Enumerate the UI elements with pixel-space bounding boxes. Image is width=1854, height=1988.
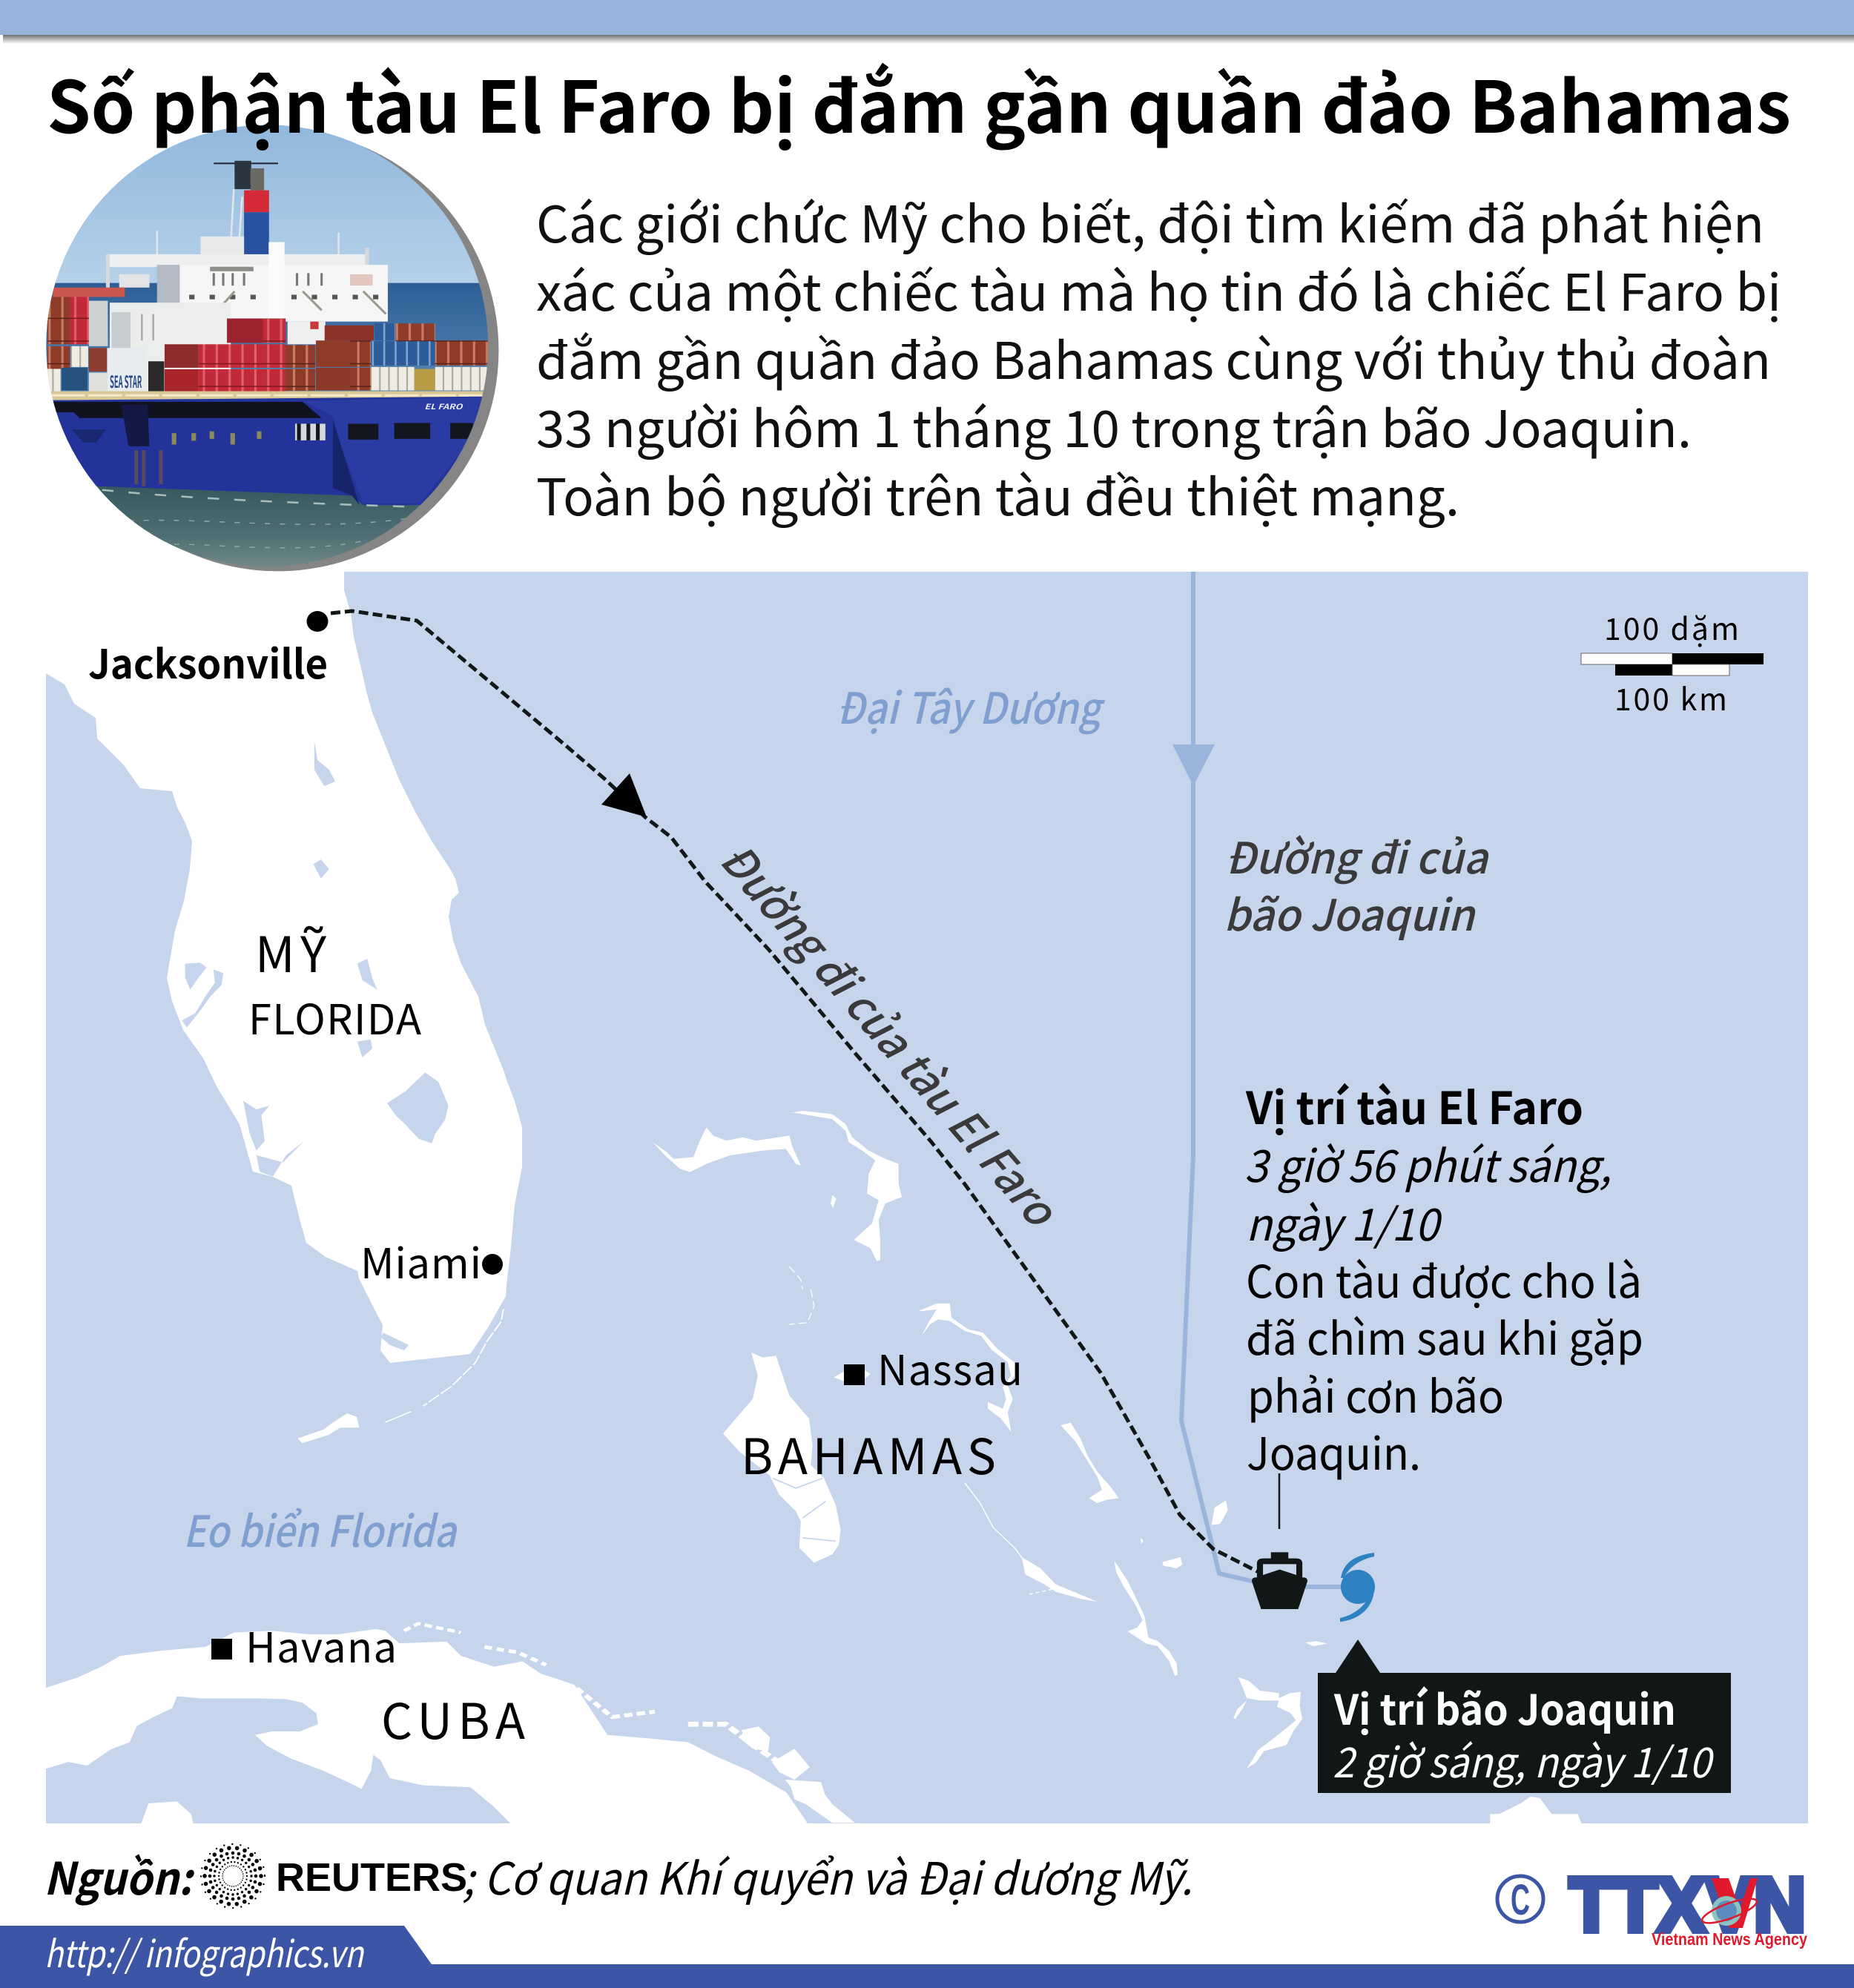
logo: TTXVN: TTXVN: [1569, 1862, 1806, 1947]
scale bar: 100 km: [1614, 675, 1727, 719]
icon: copyright: C: [1511, 1876, 1530, 1924]
label: storm route: Đường đi của: [1225, 824, 1490, 886]
intro text block: Toàn bộ người trên tàu đều thiệt mạng.: [536, 457, 1459, 530]
label: Miami: Miami: [360, 1231, 481, 1291]
Miami marker: [482, 1254, 503, 1275]
land: Bahamas islands: [653, 1111, 1583, 1826]
scale bar: [1581, 604, 1764, 719]
land: Florida: [44, 571, 522, 1443]
Jacksonville marker: [307, 611, 328, 632]
label: ship route: Đường đi của tàu El Faro: [707, 828, 1075, 1240]
label: MỸ: MỸ: [255, 916, 327, 987]
intro text block: [536, 184, 1781, 530]
callout: storm position: 2 giờ sáng, ngày 1/10: [1333, 1730, 1715, 1790]
text block: El Faro position: Vị trí tàu El Faro: [1245, 1073, 1583, 1137]
photo: El Faro cargo ship in circle: SEA STAR: [110, 369, 142, 393]
label: FLORIDA: FLORIDA: [248, 987, 421, 1047]
icon: Reuters dotted logo: [201, 1844, 265, 1908]
Nassau marker: [844, 1364, 865, 1385]
ship route of El Faro: [331, 611, 1258, 1572]
intro text block: đắm gần quần đảo Bahamas cùng với thủy thủ đoàn: [536, 320, 1771, 394]
label: BAHAMAS: BAHAMAS: [741, 1418, 996, 1489]
intro text block: 33 người hôm 1 tháng 10 trong trận bão Joaquin.: [536, 389, 1692, 462]
label: storm route: bão Joaquin: [1224, 881, 1477, 943]
ship name: EL FARO: [424, 400, 464, 412]
label: CUBA: CUBA: [381, 1682, 525, 1754]
text block: El Faro position: ngày 1/10: [1246, 1189, 1443, 1254]
Havana marker: [211, 1639, 232, 1660]
label: Jacksonville: Jacksonville: [88, 632, 328, 690]
top header bar: [0, 0, 1854, 44]
text block: El Faro position: Joaquin.: [1247, 1419, 1421, 1483]
map panel: [44, 571, 1808, 1836]
callout: storm position: Vị trí bão Joaquin: [1333, 1677, 1676, 1737]
land: Cuba: [44, 1624, 814, 1836]
label: Nassau: Nassau: [877, 1338, 1023, 1398]
logo: TTXVN: Vietnam News Agency: [1652, 1929, 1807, 1949]
text block: El Faro position: 3 giờ 56 phút sáng,: [1244, 1131, 1611, 1195]
text block: El Faro position: [1244, 1073, 1643, 1483]
footer band with URL: [0, 1925, 1854, 1988]
intro text block: Các giới chức Mỹ cho biết, đội tìm kiếm đã phát hiện: [536, 184, 1764, 257]
icon: copyright: [1497, 1876, 1543, 1924]
source text: ; Cơ quan Khí quyển và Đại dương Mỹ.: [463, 1843, 1192, 1908]
intro text block: xác của một chiếc tàu mà họ tin đó là chiếc El Faro bị: [536, 252, 1781, 326]
source: Reuters wordmark: REUTERS: [276, 1855, 467, 1900]
label: Atlantic Ocean: Đại Tây Dương: [837, 674, 1106, 736]
footer band with URL: http:// infographics.vn: [44, 1925, 365, 1978]
text block: El Faro position: phải cơn bão: [1247, 1361, 1504, 1426]
icon: ship: [1252, 1552, 1307, 1609]
label: Havana: Havana: [245, 1615, 397, 1675]
source label: Nguồn:: [44, 1843, 194, 1908]
label: Florida Strait: Eo biển Florida: [183, 1497, 458, 1559]
icon: hurricane: [1340, 1553, 1375, 1622]
callout: storm position: [1318, 1639, 1731, 1793]
label: storm route: [1227, 835, 1488, 940]
title: Số phận tàu El Faro bị đắm gần quần đảo Bahamas: [47, 50, 1791, 153]
storm track of Joaquin: [1172, 571, 1342, 1587]
photo: El Faro cargo ship in circle: [38, 113, 507, 579]
text block: El Faro position: đã chìm sau khi gặp: [1246, 1304, 1643, 1368]
leader line to ship: [1279, 1473, 1280, 1529]
text block: El Faro position: Con tàu được cho là: [1246, 1246, 1642, 1311]
scale bar: 100 dặm: [1604, 604, 1739, 649]
